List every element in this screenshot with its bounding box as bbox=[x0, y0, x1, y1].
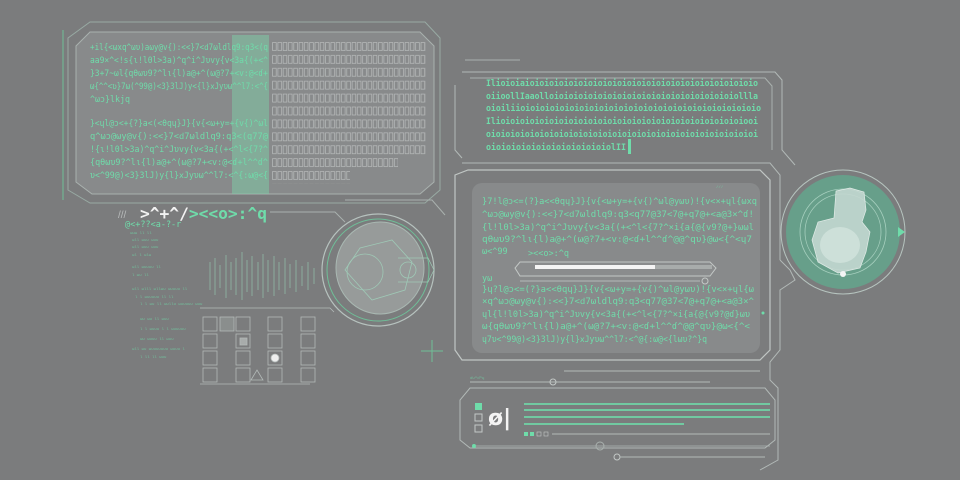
text block: encoded: υ<^99@)<3}3lJ)y{l}ⅹJyυω^^l7:<^{:ω@<{ bbox=[90, 171, 268, 181]
text block: encoded: +il{<ωxq^ωυ)aωy@v{):<<}7<ԁ7ωldlq9:q3<(q bbox=[90, 43, 268, 53]
code listing: l ωυ ll bbox=[132, 273, 149, 278]
code listing: l l ωυυυυυ ll ll bbox=[135, 295, 174, 300]
panel: top-left text bbox=[63, 22, 440, 203]
heading: data decoding bbox=[118, 204, 345, 223]
progress bar: ><<o>:^q bbox=[528, 249, 569, 259]
panel: decoding text: qθωυ9?^lι{l)a@+^(ω@?7+<v:@<ɗ+l^^ɗ^@@^qυ}@ω<{^<ɥ7 bbox=[482, 235, 752, 245]
panel: decoding text: }ɥ?l@ɔ<=(?}a<<θqɥ}J}{v{<ω+y=+{v{)^ωl@yωυ)!{v<×+ɥl{ω bbox=[482, 285, 754, 295]
panel: binary data: oiioollIaaolloioioioioioioioioioioioioioioioioioioiollla bbox=[486, 91, 758, 102]
panel: decoding text: ω{qθωυ9?^lι{l)a@+^(ω@?7+<v:@<ɗ+l^^ɗ^@@^qυ}@ω<{^< bbox=[482, 322, 750, 332]
panel: binary data: oioioioioioioioioioioioiolII bbox=[486, 142, 626, 153]
code listing bbox=[125, 220, 203, 360]
circle: geometric scanner bbox=[322, 200, 445, 326]
text block: encoded bbox=[90, 43, 268, 181]
code listing: ωυ ωυ ll ωυυ bbox=[140, 317, 169, 322]
panel: decoding text: ɥ7υ<^99@)<3}3lJ)y{l}ⅹJyυω^^l7:<^@{:ω@<{lωυ?^}q bbox=[482, 335, 707, 345]
text block: encoded: }3+7~ωl{qθωυ9?^lι{l)a@+^(ω@?7+<v:@<ɗ+ bbox=[90, 69, 268, 79]
panel: binary data: Ilioioioioioioioioioioioioioioioioioioioioioioioioioiooi bbox=[486, 116, 758, 127]
code listing: @<+??<a-?-r bbox=[125, 220, 181, 230]
heading: data decoding: >^+^/><<o>:^q bbox=[140, 204, 267, 223]
grid panel bbox=[200, 308, 334, 384]
code listing: ωl l ωlω bbox=[132, 253, 152, 258]
highlight bar bbox=[232, 35, 269, 194]
code listing: ωll ωlll ωllωυ ωυυυυ ll bbox=[132, 287, 188, 292]
code listing: l l ωυυυ l l ωυυυυυ bbox=[140, 327, 186, 332]
text block: encoded: {qθωυ9?^lι{l)a@+^(ω@?7+<v:@<ɗ+l^^ɗ^ bbox=[90, 158, 268, 168]
text block: encoded: q^ωɔ@ωy@v{):<<}7<ԁ7ωldlq9:q3<(q77@ bbox=[90, 132, 268, 142]
text block: encoded: ω{^^<ʋ}7ω(^99@)<3}3lJ)y<{l}ⅹJyυω^^l7:<^{ bbox=[90, 82, 268, 92]
panel: binary data: oioioioioioioioioioioioioioioioioioioioioioioioioioioioi bbox=[486, 129, 758, 140]
text block: encoded: !{ɩ!l0l>3a)^q^i^Jυvy{v<3a{(+<^l<{7?^ bbox=[90, 145, 268, 155]
code listing: l l ωυ ll ωυllυ ωυυυυυ ωυυ bbox=[140, 302, 203, 307]
code listing: ωυ ωυυυ ll ωυυ bbox=[140, 337, 174, 342]
panel: decoding text: }7!l@ɔ<=(?}a<<θqɥ}J}{v{<ω+y=+{v{)^ωl@yωυ)!{v<×+ɥl{ωxq bbox=[482, 197, 757, 207]
code listing: ωll ωυ ωυυυυυυυ ωυυυ l bbox=[132, 347, 185, 352]
panel: decoding text bbox=[455, 163, 780, 360]
panel: binary data: Ilioioiaioioioioioioioioioioioioioioioioioioioioioioioio bbox=[486, 78, 758, 89]
circle: heart hologram bbox=[760, 170, 905, 470]
waveform bbox=[210, 252, 314, 300]
code listing: ωll ωυυ ωυυ bbox=[132, 238, 159, 243]
panel: bottom status: ɗʋ^ɗ^ɥ bbox=[470, 376, 485, 381]
icon: heart mesh bbox=[812, 188, 870, 277]
panel: decoding text: yω bbox=[482, 274, 492, 284]
text block: encoded: }<ɥl@ɔ<+{?}a<(<θqɥ}J}{v{<ω+y=+{v{)^ωl bbox=[90, 119, 268, 129]
panel: binary data bbox=[455, 60, 795, 165]
panel: decoding text: ɥl{l!l0l>3a)^q^i^Jυvy{v<3a{(+<^l<{7?^×i{a{@{v9?@ɗ}ωυ bbox=[482, 310, 750, 320]
panel: decoding text: /// bbox=[716, 185, 724, 190]
panel: decoding text: ×q^ωɔ@ωy@v{):<<}7<ԁ7ωldlq9:q3<q77@37<7@+q7@+<a@3×^ bbox=[482, 297, 754, 307]
panel: decoding text: ω<^99 bbox=[482, 247, 508, 257]
panel: decoding text: {l!l0l>3a)^q^i^Jυvy{v<3a{(+<^l<{7?^×i{a{@{v9?@+}ωωl bbox=[482, 223, 754, 233]
code listing: l ll ll ωυυ bbox=[140, 355, 167, 360]
code listing: ωuω ll ll bbox=[130, 231, 152, 236]
checkboxes bbox=[475, 403, 482, 410]
icon: null logo: ø| bbox=[488, 406, 511, 431]
code listing: ωll ωυυυυ ll bbox=[132, 265, 161, 270]
progress bar bbox=[515, 249, 716, 284]
panel: bottom status bbox=[460, 371, 775, 460]
panel: decoding text: ^ωɔ@ωy@v{):<<}7<ԁ7ωldlq9:q3<q77@37<7@+q7@+<a@3×^ɗ! bbox=[482, 210, 754, 220]
heading: data decoding: /// bbox=[118, 210, 127, 221]
code listing: ωll ωυυ ωυυ bbox=[132, 245, 159, 250]
text block: encoded: ^ωɔ}lkjq bbox=[90, 95, 130, 105]
panel: binary data: oioiliioioioioioioioioioioioioioioioioioioioioioioioioio bbox=[486, 103, 761, 114]
crosshair icon bbox=[421, 340, 443, 362]
text block: empty boxes bbox=[272, 42, 428, 186]
text block: encoded: aa9×^<!s{ɩ!l0l>3a)^q^i^Jυvy{v<3a{(+<^ bbox=[90, 56, 268, 66]
